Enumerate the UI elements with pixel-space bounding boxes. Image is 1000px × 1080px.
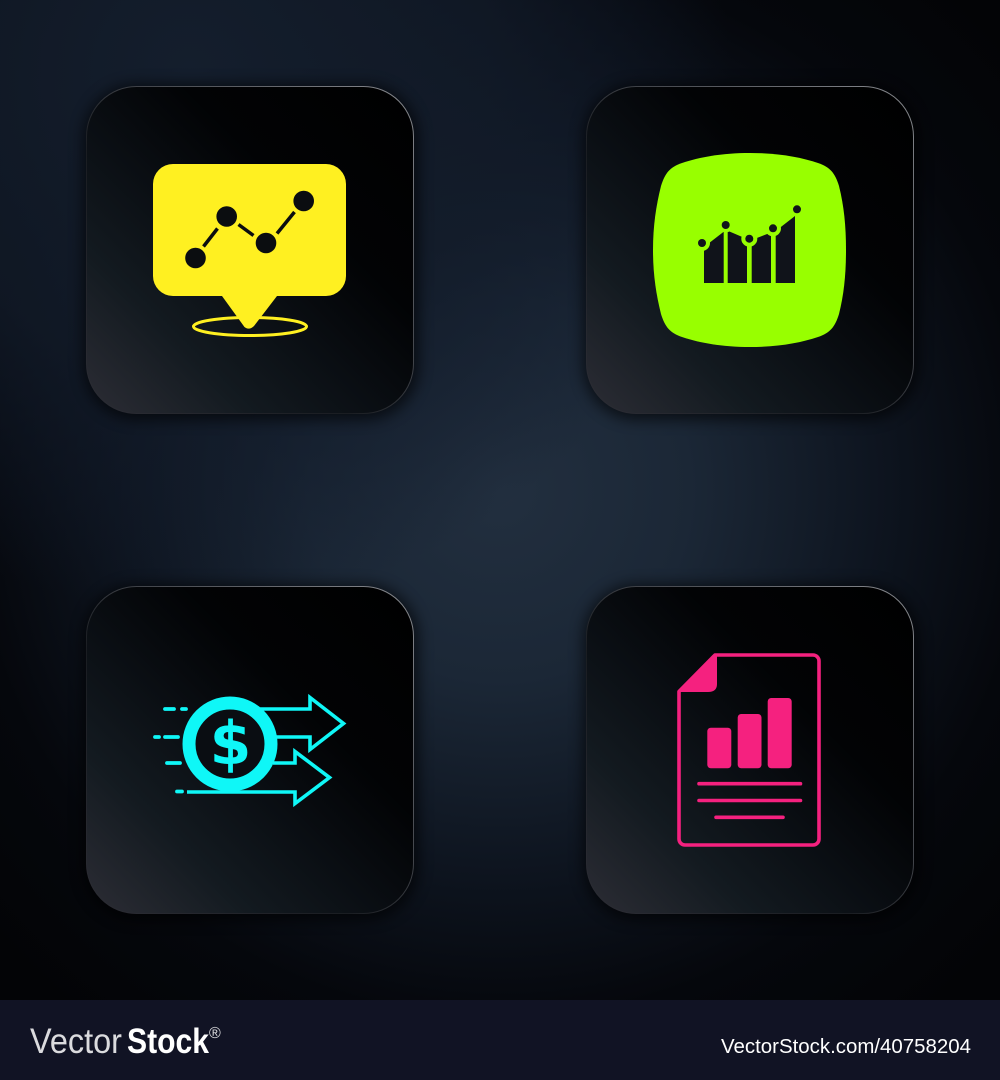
panel: report document: [583, 584, 919, 920]
image id: VectorStock.com/40758204: [721, 1036, 971, 1058]
folded corner: [678, 654, 717, 692]
footer bar: [0, 1000, 1000, 1080]
squircle: [653, 153, 846, 347]
arrows: [187, 698, 344, 804]
card shadow: [83, 84, 419, 420]
card shadow: [83, 584, 419, 920]
card: [586, 86, 914, 414]
bars: [704, 216, 795, 283]
page outline: [679, 655, 819, 845]
coin: [189, 703, 271, 785]
bars: [707, 698, 792, 768]
card: [86, 86, 414, 414]
logo: [30, 1022, 221, 1061]
ring: [194, 318, 306, 336]
bubble: [153, 164, 346, 329]
logo word: Stock: Stock: [127, 1022, 209, 1061]
text lines: [699, 784, 800, 817]
card: [586, 586, 914, 914]
speed dashes: [155, 709, 186, 792]
panel: dollar coin with arrows: [83, 584, 419, 920]
point halos: [694, 218, 781, 251]
footer background: [0, 1000, 1000, 1080]
card: [86, 586, 414, 914]
line chart: [185, 191, 314, 268]
panel: area chart on lime squircle: [583, 84, 919, 420]
panel: speech bubble line chart: [83, 84, 419, 420]
icon: document with bar chart: [678, 654, 819, 845]
icon: coin and arrows: [155, 698, 344, 804]
card shadow: [583, 584, 919, 920]
card shadow: [583, 84, 919, 420]
logo word: Vector: Vector: [30, 1022, 122, 1061]
icon: chart on squircle: [653, 153, 846, 347]
registered mark: ®: [209, 1025, 221, 1042]
dollar sign: $: [210, 709, 251, 779]
icon: map pin bubble with line chart: [153, 164, 346, 336]
data points: [698, 205, 801, 247]
